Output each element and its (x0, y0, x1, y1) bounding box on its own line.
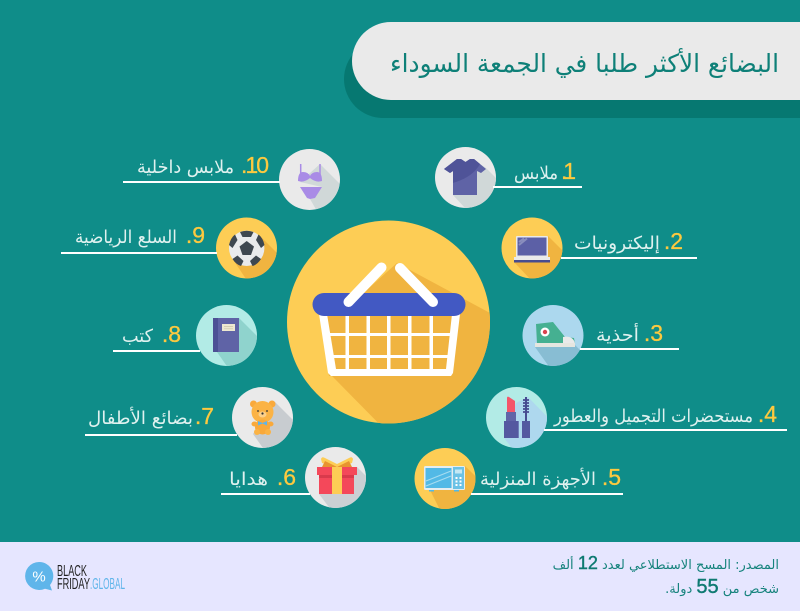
label: 5 home appliances (471, 464, 623, 495)
label: 4 cosmetics: .4 (758, 401, 777, 427)
label: 10 underwear (123, 152, 280, 183)
item 6: gifts (221, 447, 366, 508)
source note: المصدر: المسح الاستطلاعي لعدد 12 ألف (553, 553, 779, 573)
label: 7 children's goods: بضائع الأطفال (88, 407, 193, 429)
label: 4 cosmetics (544, 401, 787, 431)
source note (553, 553, 779, 598)
icon: gift box (305, 447, 366, 508)
label: 2 electronics: إليكترونيات (574, 233, 660, 254)
label: 8 books: .8 (162, 321, 181, 347)
label: 8 books (113, 321, 200, 352)
label: 6 gifts: هدايا (229, 469, 268, 490)
logo: Black Friday Global: .GLOBAL (90, 576, 125, 593)
footer band (0, 542, 800, 611)
label: 1 clothes: ملابس (514, 163, 558, 184)
label: 5 home appliances: الأجهزة المنزلية (480, 468, 596, 490)
item 5: home appliances (414, 448, 623, 509)
label: 9 sports goods: .9 (186, 222, 205, 248)
item 3: shoes (522, 305, 679, 366)
label: 3 shoes: .3 (644, 320, 663, 346)
item 7: children's goods (85, 387, 293, 448)
label: 3 shoes: أحذية (596, 323, 639, 346)
item 8: books (113, 305, 257, 366)
icon: t-shirt (435, 147, 496, 208)
logo: Black Friday Global (25, 562, 125, 593)
item 2: electronics (502, 218, 697, 278)
label: 2 electronics: .2 (664, 228, 683, 254)
label: 10 underwear: ملابس داخلية (137, 157, 234, 178)
item 9: sports goods (61, 218, 277, 278)
label: 6 gifts: .6 (277, 464, 296, 490)
label: 8 books: كتب (122, 326, 153, 347)
label: 2 electronics (561, 228, 697, 259)
icon: laptop (502, 218, 562, 278)
label: 5 home appliances: .5 (602, 464, 621, 490)
label: 9 sports goods (61, 222, 217, 254)
label: 9 sports goods: السلع الرياضية (75, 227, 177, 248)
icon: book (196, 305, 257, 366)
label: 1 clothes (493, 158, 582, 188)
label: 10 underwear: .10 (241, 152, 269, 178)
icon: soccer ball (216, 218, 277, 278)
label: 4 cosmetics: مستحضرات التجميل والعطور (553, 406, 753, 427)
icon: lingerie (279, 149, 340, 210)
item 4: cosmetics (486, 387, 787, 448)
source note: شخص من 55 دولة. (665, 576, 779, 598)
icon: lipstick and mascara (486, 387, 547, 448)
item 1: clothes (435, 147, 582, 208)
label: 1 clothes: .1 (561, 158, 576, 184)
icon: microwave (414, 448, 476, 509)
label: 7 children's goods (85, 403, 237, 436)
title text: البضائع الأكثر طلبا في الجمعة السوداء (390, 47, 779, 79)
logo: Black Friday Global: FRIDAY (57, 576, 90, 593)
title banner (344, 22, 800, 118)
item 10: underwear (123, 149, 340, 210)
label: 6 gifts (221, 464, 310, 495)
icon: teddy bear (232, 387, 293, 448)
label: 3 shoes (580, 320, 679, 350)
icon: sneaker (522, 305, 584, 366)
logo: Black Friday Global: % (32, 568, 46, 586)
central basket icon (287, 220, 490, 424)
logo: Black Friday Global: BLACK (57, 563, 87, 580)
label: 7 children's goods: .7 (195, 403, 214, 429)
